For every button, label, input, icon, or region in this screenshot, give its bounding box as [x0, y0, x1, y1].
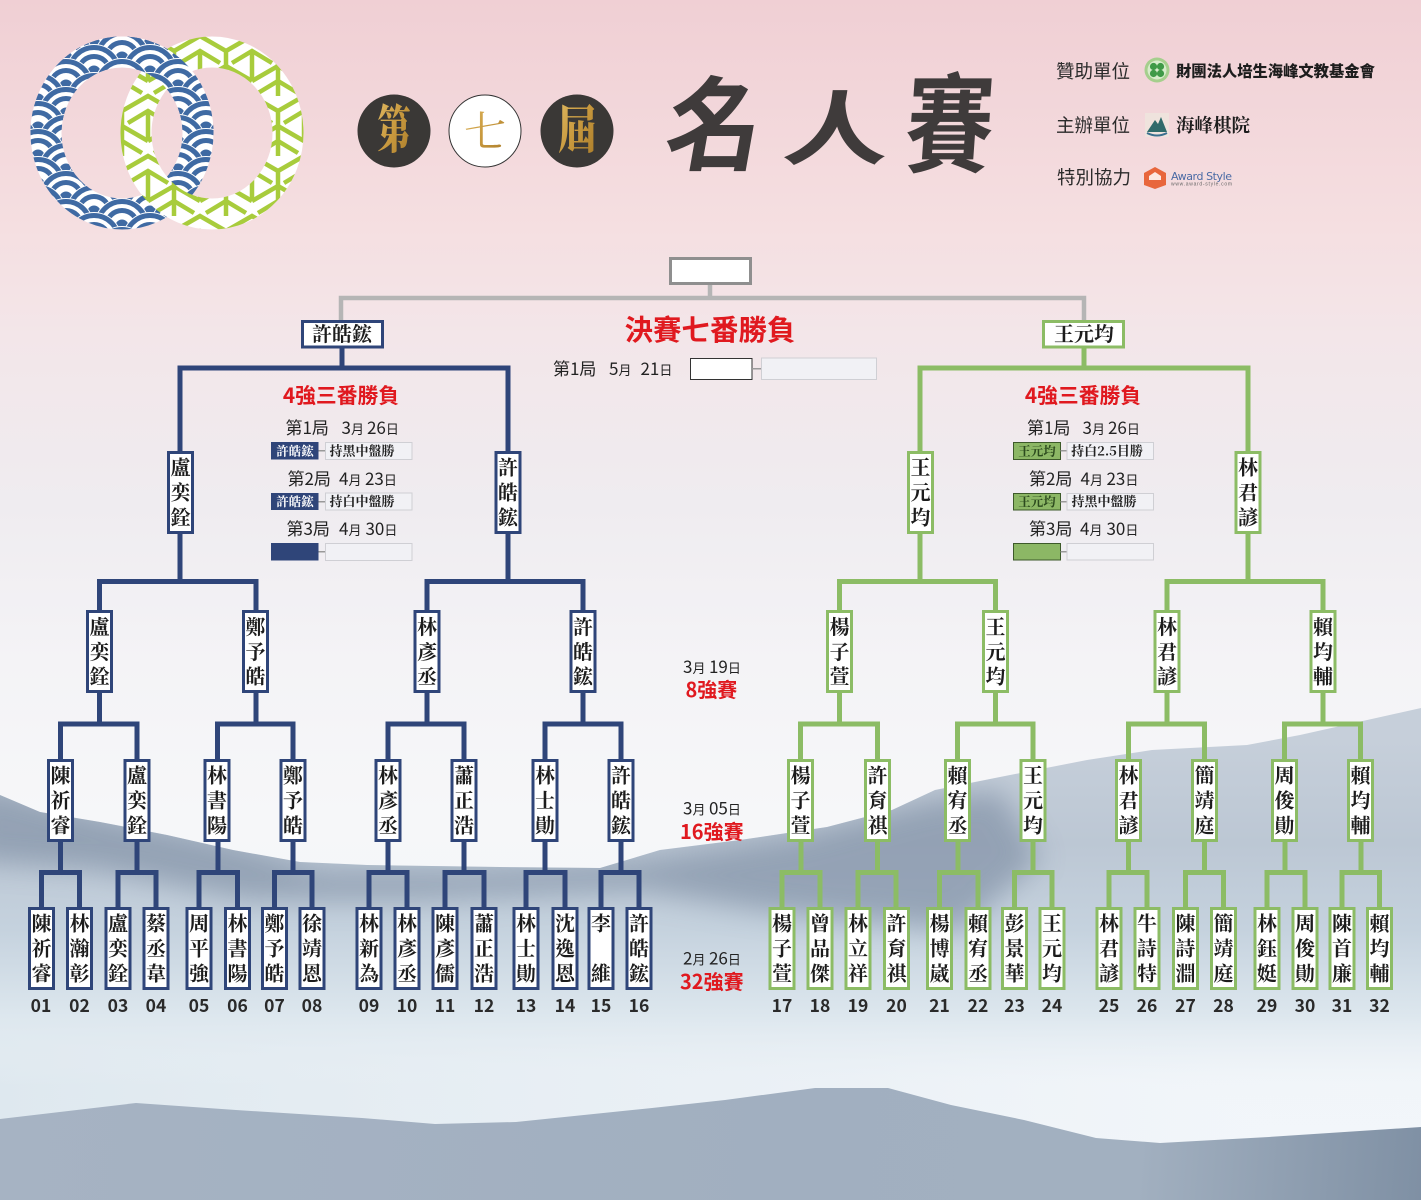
- seed numbers: 31: [1332, 993, 1352, 1018]
- seed numbers: 16: [629, 993, 649, 1018]
- player 17: 楊子萱: [772, 908, 792, 986]
- player 31: 陳首廉: [1332, 908, 1352, 986]
- right game 3: [1014, 515, 1154, 560]
- title: 賽: [901, 67, 998, 187]
- seed numbers: 11: [435, 993, 455, 1018]
- player 06: 林書陽: [228, 908, 248, 986]
- 8強 date: 3月: [683, 653, 705, 678]
- player 15: 李維: [591, 908, 611, 986]
- player 20: 許育祺: [886, 908, 908, 986]
- player 16: 許皓鋐: [629, 908, 651, 986]
- right game 2: 月: [1090, 470, 1103, 489]
- quarterfinal players: [88, 611, 1335, 692]
- 8強 label: 8強賽: [686, 674, 737, 703]
- seed numbers: 12: [474, 993, 494, 1018]
- player: 林彥丞: 林彥丞: [417, 611, 437, 690]
- left game 3: 日: [384, 520, 397, 539]
- right game 3: 日: [1125, 520, 1138, 539]
- seed numbers: 26: [1137, 993, 1157, 1018]
- final game 1 date: 月: [618, 360, 631, 379]
- seed numbers: 32: [1369, 993, 1390, 1018]
- final game 1 date: 21: [640, 355, 659, 380]
- 16強 date: 05: [709, 794, 728, 820]
- panel: left semifinal series: [271, 379, 412, 560]
- sponsor row: 贊助單位: [1056, 58, 1130, 84]
- left game 2: 日: [384, 470, 397, 489]
- partner row: [1057, 164, 1232, 190]
- player: 林君諺: 林君諺: [1238, 452, 1258, 530]
- player: 賴均輔: 賴均輔: [1350, 760, 1372, 838]
- seed numbers: 21: [929, 993, 950, 1018]
- seed numbers: [31, 993, 1390, 1018]
- organizer row: 海峰棋院: [1176, 112, 1251, 138]
- player: 鄭予皓: 鄭予皓: [246, 611, 266, 690]
- right game 1: 王元均: [1018, 442, 1056, 460]
- seed numbers: 20: [886, 993, 907, 1018]
- round of 16 players: [48, 760, 1372, 840]
- player: 王元均: 王元均: [1023, 760, 1043, 838]
- badge: 第: 第: [377, 90, 411, 163]
- organizer row: [1056, 112, 1251, 138]
- right game 1: 持白2.5目勝: [1071, 440, 1143, 460]
- final game 1 date: 第1局: [553, 355, 596, 380]
- right game 3: 30: [1106, 515, 1125, 540]
- finalist: 王元均: 王元均: [1054, 318, 1114, 347]
- left game 3: 第3局: [286, 515, 330, 540]
- player 05: 周平強: [189, 908, 211, 986]
- right game 2: 持黑中盤勝: [1071, 491, 1137, 510]
- player 04: 蔡丞韋: [146, 908, 166, 986]
- 8強 date: 19: [709, 653, 728, 678]
- seed numbers: 18: [810, 993, 830, 1018]
- left game 3: 4: [339, 515, 348, 540]
- left game 2: 23: [365, 465, 384, 490]
- connectors: right bracket: [782, 348, 1380, 908]
- finalist: 許皓鋐: 許皓鋐: [312, 318, 374, 347]
- player: 盧奕銓: 盧奕銓: [90, 611, 112, 690]
- heading: left 4強: 4強三番勝負: [283, 379, 399, 409]
- player: 王元均: 王元均: [986, 611, 1006, 690]
- right game 2: 王元均: [1018, 492, 1056, 510]
- player 26: 牛詩特: [1137, 908, 1157, 986]
- left game 2: 許皓鋐: [276, 492, 315, 510]
- left game 1: 許皓鋐: [276, 442, 315, 460]
- left game 2: 4: [339, 465, 348, 490]
- player: 林書陽: 林書陽: [207, 760, 227, 838]
- round of 32 players: [30, 908, 1392, 988]
- player 03: 盧奕銓: [108, 908, 131, 986]
- left game 2: 月: [348, 470, 361, 489]
- right game 2: 23: [1106, 465, 1125, 490]
- player: 鄭予皓: 鄭予皓: [283, 760, 303, 838]
- champion box: [670, 258, 750, 284]
- connector: final: [341, 284, 1084, 322]
- player: 楊子萱: 楊子萱: [790, 760, 810, 838]
- player 13: 林士勛: [516, 908, 536, 986]
- seed numbers: 06: [227, 993, 248, 1018]
- player: 賴均輔: 賴均輔: [1313, 611, 1334, 690]
- seed numbers: 22: [968, 993, 988, 1018]
- left game 3: 月: [348, 520, 361, 539]
- final game 1 date: 日: [659, 360, 672, 379]
- left game 1: 日: [386, 419, 399, 438]
- 16強 date: 日: [728, 800, 741, 818]
- seed numbers: 17: [772, 993, 792, 1018]
- seed numbers: 24: [1042, 993, 1062, 1018]
- seed numbers: 05: [189, 993, 209, 1018]
- title: 人: [779, 86, 895, 175]
- left game 1: 持黑中盤勝: [329, 440, 395, 460]
- player: 陳祈睿: 陳祈睿: [50, 760, 70, 838]
- player 19: 林立祥: [848, 908, 868, 986]
- player 23: 彭景華: [1004, 908, 1026, 986]
- background: middle mountains: [0, 708, 1421, 1046]
- left game 2: 持白中盤勝: [329, 491, 395, 510]
- player: 許皓鋐: 許皓鋐: [498, 452, 520, 530]
- left game 1: 26: [367, 414, 386, 439]
- badge: 第: [358, 90, 430, 168]
- right game 2: 4: [1080, 465, 1090, 490]
- final game 1 result: [690, 358, 876, 380]
- badge: 屆: [540, 89, 614, 168]
- semifinal players: [168, 452, 1260, 532]
- 8強 date: 日: [728, 658, 741, 677]
- left game 3: [271, 515, 412, 560]
- player 27: 陳詩淵: [1176, 908, 1196, 986]
- player 09: 林新為: [359, 908, 379, 986]
- right game 2: 日: [1125, 470, 1138, 489]
- player: 楊子萱: 楊子萱: [830, 611, 850, 690]
- seed numbers: 23: [1004, 993, 1025, 1018]
- right game 1: 3: [1082, 414, 1092, 439]
- heading: final series: 決賽七番勝負: [624, 308, 796, 349]
- seed numbers: 07: [264, 993, 285, 1018]
- player 02: 林瀚彰: [70, 908, 90, 986]
- player: 林彥丞: 林彥丞: [378, 760, 398, 838]
- player 21: 楊博崴: [930, 908, 950, 986]
- seed numbers: 25: [1099, 993, 1119, 1018]
- seed numbers: 14: [555, 993, 575, 1018]
- player: 盧奕銓: 盧奕銓: [170, 452, 194, 530]
- left game 1: 第1局: [286, 414, 329, 439]
- player: 許皓鋐: 許皓鋐: [611, 760, 633, 838]
- player 01: 陳祈睿: [32, 908, 52, 986]
- connectors: left bracket: [42, 348, 639, 908]
- right game 2: 第2局: [1029, 465, 1072, 490]
- logo: interlocked rings: [46, 52, 288, 214]
- badge: 屆: 屆: [558, 89, 596, 163]
- 32強 date: 2月: [683, 944, 705, 970]
- player 25: 林君諺: [1099, 908, 1119, 986]
- seed numbers: 13: [516, 993, 536, 1018]
- round labels: [680, 653, 744, 995]
- partner row: Award Style: [1171, 170, 1232, 183]
- seed numbers: 03: [108, 993, 128, 1018]
- player: 蕭正浩: 蕭正浩: [454, 760, 474, 838]
- seed numbers: 09: [359, 993, 379, 1018]
- sponsor row: [1056, 58, 1376, 84]
- 32強 date: 日: [728, 950, 741, 968]
- seed numbers: 02: [69, 993, 90, 1018]
- player: 周俊勛: 周俊勛: [1274, 760, 1296, 838]
- right game 1: 第1局: [1027, 414, 1070, 439]
- player 32: 賴均輔: [1370, 908, 1390, 986]
- background: lower mountains: [0, 1088, 1421, 1200]
- player 30: 周俊勛: [1295, 908, 1316, 986]
- player: 林士勛: 林士勛: [535, 760, 555, 838]
- seed numbers: 29: [1257, 993, 1277, 1018]
- player: 許育祺: 許育祺: [868, 760, 890, 838]
- 32強 date: 26: [709, 944, 728, 970]
- seed numbers: 28: [1213, 993, 1234, 1018]
- player 10: 林彥丞: [397, 908, 417, 986]
- sponsor row: 財團法人培生海峰文教基金會: [1176, 60, 1376, 82]
- right game 3: 4: [1080, 515, 1089, 540]
- player: 賴宥丞: 賴宥丞: [948, 760, 968, 838]
- right game 1: 26: [1108, 414, 1127, 439]
- player 18: 曾品傑: [810, 908, 830, 986]
- player 14: 沈逸恩: [555, 908, 577, 986]
- player 11: 陳彥儒: [435, 908, 455, 986]
- player: 許皓鋐: 許皓鋐: [573, 611, 595, 690]
- player 12: 蕭正浩: [474, 908, 494, 986]
- player: 林君諺: 林君諺: [1118, 760, 1138, 838]
- seed numbers: 04: [146, 993, 166, 1018]
- heading: right 4強: 4強三番勝負: [1025, 379, 1141, 409]
- left game 2: 第2局: [288, 465, 331, 490]
- player: 王元均: 王元均: [910, 452, 930, 530]
- 16強 label: 16強賽: [680, 816, 744, 845]
- right game 2: [1014, 465, 1154, 510]
- left game 1: 月: [351, 419, 364, 438]
- 16強 date: 3月: [683, 794, 705, 820]
- 32強 label: 32強賽: [680, 966, 744, 995]
- player 22: 賴宥丞: [968, 908, 989, 986]
- badge: 七: [449, 95, 521, 167]
- left game 1: [271, 414, 412, 460]
- title: 名: [657, 71, 773, 184]
- player 24: 王元均: [1042, 908, 1062, 986]
- player 28: 簡靖庭: [1214, 908, 1234, 986]
- player 29: 林鈺娗: [1257, 908, 1278, 986]
- player: 林君諺: 林君諺: [1157, 611, 1177, 690]
- player: 簡靖庭: 簡靖庭: [1194, 760, 1214, 838]
- left game 3: 30: [366, 515, 384, 540]
- right game 1: 日: [1127, 419, 1140, 438]
- partner row: www.award-style.com: [1171, 182, 1232, 188]
- background: lower-left haze: [0, 1000, 1421, 1150]
- player 07: 鄭予皓: [264, 908, 284, 986]
- seed numbers: 19: [848, 993, 868, 1018]
- left game 1: 3: [342, 414, 351, 439]
- right game 1: [1014, 414, 1154, 460]
- organizer row: 主辦單位: [1056, 112, 1130, 138]
- seed numbers: 30: [1295, 993, 1315, 1018]
- right game 3: 月: [1089, 520, 1102, 539]
- partner row: 特別協力: [1057, 164, 1131, 190]
- right game 1: 月: [1092, 419, 1105, 438]
- seed numbers: 01: [31, 993, 51, 1018]
- player: 盧奕銓: 盧奕銓: [127, 760, 150, 838]
- badge: 七: 七: [464, 99, 506, 159]
- panel: right semifinal series: [1014, 379, 1154, 560]
- seed numbers: 15: [591, 993, 611, 1018]
- right game 3: 第3局: [1029, 515, 1072, 540]
- left game 2: [271, 465, 412, 510]
- seed numbers: 27: [1175, 993, 1196, 1018]
- seed numbers: 08: [302, 993, 322, 1018]
- title: [657, 67, 998, 187]
- final game 1 date: 5: [609, 355, 618, 380]
- player 08: 徐靖恩: [302, 908, 324, 986]
- seed numbers: 10: [397, 993, 417, 1018]
